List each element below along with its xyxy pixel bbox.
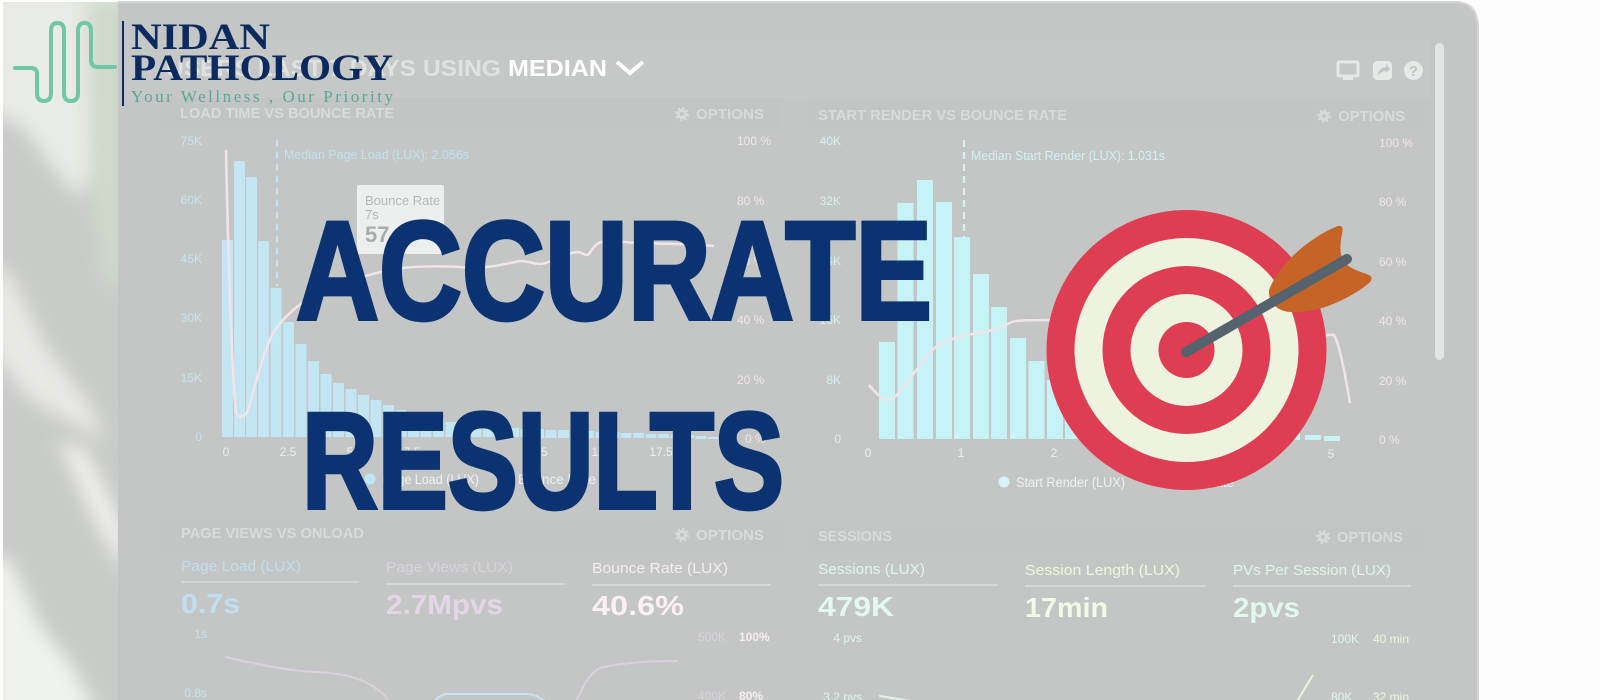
- stat: page views: [386, 559, 565, 620]
- median marker: [963, 140, 965, 238]
- tooltip: Bounce Rate: [365, 193, 440, 208]
- right axis labels: 40 %: [737, 313, 765, 327]
- axis labels: 0.8s: [184, 686, 207, 700]
- right axis labels: 100 %: [737, 134, 771, 148]
- legend: [998, 475, 1234, 490]
- right axis labels: 80 %: [1379, 195, 1407, 209]
- axis labels: [823, 631, 1409, 700]
- x axis labels: 12.5: [524, 445, 548, 459]
- right axis labels: 100 %: [1379, 136, 1413, 150]
- axis labels: 100K: [1331, 632, 1359, 646]
- x axis labels: 7.5: [404, 445, 421, 459]
- stat: sessions: Sessions (LUX): [818, 561, 925, 578]
- options button: OPTIONS: [1337, 530, 1403, 546]
- x axis labels: 5: [1328, 447, 1335, 461]
- x axis labels: [223, 445, 673, 459]
- panel heading: LOAD TIME VS BOUNCE RATE: [180, 106, 394, 122]
- brand name: NIDAN: [131, 17, 270, 58]
- median label: Median Start Render (LUX): 1.031s: [971, 148, 1165, 163]
- stat: bounce rate: [592, 560, 771, 621]
- dashboard header band: [125, 40, 1430, 98]
- stat: page load: [181, 558, 359, 619]
- dashboard heading: [166, 55, 643, 81]
- right axis labels: 60 %: [1379, 255, 1407, 269]
- x axis labels: [865, 446, 1335, 461]
- left axis labels: [820, 134, 841, 446]
- logo: PATHOLOGY: [131, 48, 393, 89]
- axis labels: 4 pvs: [833, 631, 862, 645]
- left axis labels: 0: [834, 432, 841, 446]
- left axis labels: 32K: [820, 194, 841, 208]
- options button: OPTIONS: [1338, 109, 1405, 125]
- stat: pvs per session: [1233, 562, 1411, 623]
- dashboard heading: MEDIAN: [508, 55, 607, 81]
- left axis labels: 30K: [181, 311, 202, 325]
- stat: bounce rate: Bounce Rate (LUX): [592, 560, 728, 577]
- x axis labels: 4: [1237, 446, 1244, 460]
- options button: OPTIONS: [696, 528, 764, 544]
- panel: load time vs bounce rate: [160, 98, 780, 487]
- axis labels: 1s: [194, 627, 207, 641]
- right axis labels: [737, 134, 771, 446]
- stat: sessions: [818, 561, 998, 622]
- line chart: [879, 675, 1313, 700]
- legend: Bounce Rate: [518, 472, 596, 487]
- title: ACCURATE: [296, 192, 932, 349]
- x axis labels: 0: [223, 445, 230, 459]
- tooltip: [357, 185, 444, 254]
- tooltip: 7s: [365, 207, 379, 222]
- axis labels: 40 min: [1373, 632, 1409, 646]
- tagline: Your Wellness , Our Priority: [131, 87, 394, 106]
- title: RESULTS: [302, 385, 784, 538]
- median marker: [276, 140, 278, 286]
- left axis labels: 0: [195, 430, 202, 444]
- arrow shaft: [1186, 259, 1347, 352]
- axis labels: 100%: [739, 630, 770, 644]
- x axis labels: 17.5: [649, 445, 673, 459]
- axis labels: 500K: [698, 630, 726, 644]
- legend: [364, 472, 596, 487]
- line chart: [225, 657, 678, 700]
- x axis labels: 10: [467, 445, 481, 459]
- left axis labels: 15K: [181, 371, 202, 385]
- histogram bars: [879, 180, 1340, 441]
- options button: OPTIONS: [696, 107, 764, 123]
- scrollbar: [1435, 43, 1444, 360]
- stat: pvs per session: PVs Per Session (LUX): [1233, 562, 1391, 579]
- bounce rate line: [226, 150, 714, 416]
- left axis labels: 75K: [181, 134, 202, 148]
- divider: [122, 21, 124, 106]
- icon: pulse wave: [15, 23, 115, 101]
- left axis labels: 8K: [826, 373, 841, 387]
- x axis labels: 2.5: [280, 445, 297, 459]
- stat: pvs per session: 2pvs: [1233, 592, 1300, 623]
- panel heading: SESSIONS: [818, 529, 892, 545]
- panel: start render vs bounce rate: [805, 100, 1430, 490]
- stat: session length: 17min: [1025, 592, 1108, 623]
- left axis labels: 45K: [181, 252, 202, 266]
- icons: screen, share, help: [1338, 61, 1423, 80]
- stat: page load: 0.7s: [181, 588, 240, 619]
- right axis labels: 0 %: [1379, 433, 1400, 447]
- title: [296, 192, 932, 538]
- x axis labels: 0: [865, 446, 872, 460]
- stat: sessions: 479K: [818, 591, 894, 622]
- right axis labels: 20 %: [1379, 374, 1407, 388]
- left axis labels: 16K: [820, 313, 841, 327]
- dashboard heading: USERS LAST 7 DAYS USING: [166, 55, 501, 81]
- legend: Page Load (LUX): [382, 472, 479, 487]
- x axis labels: 3: [1144, 446, 1151, 460]
- stat: session length: [1025, 562, 1206, 623]
- right axis labels: 0 %: [745, 432, 766, 446]
- right axis labels: 20 %: [737, 373, 765, 387]
- bounce rate line: [869, 320, 1350, 403]
- stat: page views: Page Views (LUX): [386, 559, 513, 576]
- right axis labels: 80 %: [737, 194, 765, 208]
- stat: bounce rate: 40.6%: [592, 590, 684, 621]
- stat: session length: Session Length (LUX): [1025, 562, 1180, 579]
- panel heading: PAGE VIEWS VS ONLOAD: [181, 526, 364, 542]
- tooltip: 57.1: [365, 222, 408, 247]
- x axis labels: 5: [347, 445, 354, 459]
- x axis labels: 15: [591, 445, 605, 459]
- stat: page views: 2.7Mpvs: [386, 589, 503, 620]
- median label: Median Page Load (LUX): 2.056s: [284, 147, 469, 162]
- stat: page load: Page Load (LUX): [181, 558, 301, 575]
- panel heading: START RENDER VS BOUNCE RATE: [818, 108, 1067, 124]
- right axis labels: [1379, 136, 1413, 447]
- left axis labels: 60K: [181, 193, 202, 207]
- x axis labels: 1: [958, 446, 965, 460]
- legend: Bounce Rate: [1158, 475, 1234, 490]
- right axis labels: 60 %: [737, 254, 765, 268]
- axis labels: [184, 627, 770, 700]
- legend: Start Render (LUX): [1016, 475, 1125, 490]
- arrow fletching: [1269, 226, 1372, 312]
- background: blurred light streaks at left: [0, 0, 125, 700]
- panel: page views vs onload: [160, 520, 785, 700]
- icon: target with arrow: [1046, 210, 1372, 490]
- histogram bars: [222, 161, 718, 439]
- panel: sessions: [805, 522, 1425, 700]
- left axis labels: 24K: [820, 254, 841, 268]
- left axis labels: [181, 134, 202, 444]
- icons: screen, share, help: ?: [1409, 63, 1418, 80]
- icon: chevron: [617, 62, 643, 73]
- x axis labels: 2: [1051, 446, 1058, 460]
- left axis labels: 40K: [820, 134, 841, 148]
- logo: [15, 17, 394, 106]
- right axis labels: 40 %: [1379, 314, 1407, 328]
